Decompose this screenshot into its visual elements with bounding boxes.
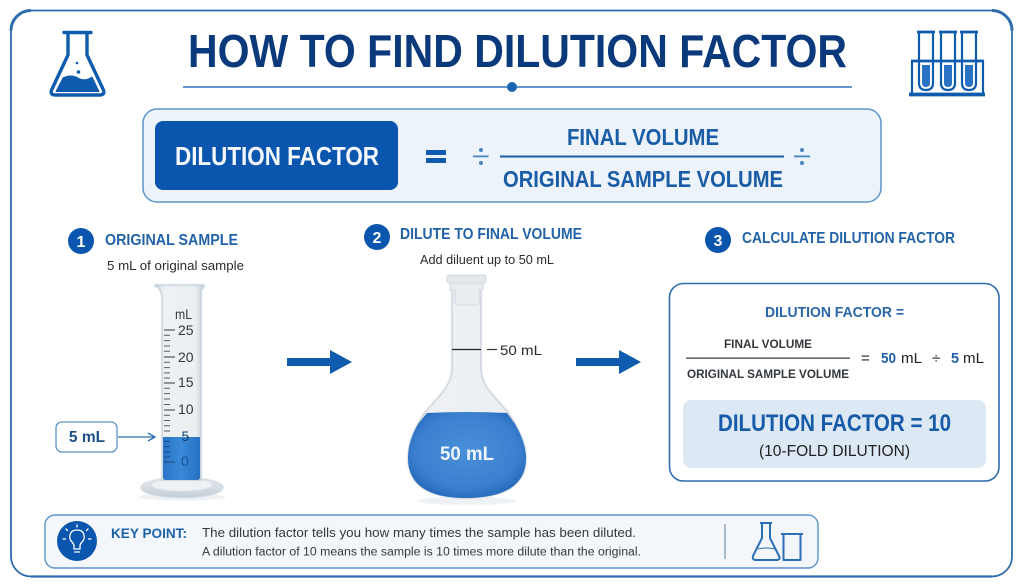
step 3 heading: 3 [714, 233, 723, 250]
worked values: 5 [951, 350, 959, 367]
volumetric flask [408, 275, 542, 505]
icon: light bulb [57, 521, 97, 561]
key point text [202, 525, 641, 558]
icon: flask and beaker [753, 523, 803, 560]
fraction: FINAL VOLUME [724, 337, 812, 351]
scale numbers: 15 [178, 374, 194, 390]
50 mL fill mark [452, 342, 542, 358]
icon: erlenmeyer flask [51, 32, 104, 95]
panel: calculation [670, 284, 999, 481]
worked values: 50 [881, 350, 896, 367]
title: HOW TO FIND DILUTION FACTOR [188, 25, 847, 77]
liquid label: 50 mL [440, 444, 494, 465]
panel: formula [143, 109, 881, 202]
scale numbers: 5 [182, 428, 190, 444]
scale numbers: 10 [178, 401, 194, 417]
key point text: A dilution factor of 10 means the sample is 10 times more dilute than the original. [202, 546, 641, 558]
key point text: The dilution factor tells you how many times the sample has been diluted. [202, 525, 636, 540]
fraction: final over original: ORIGINAL SAMPLE VOLUME [503, 166, 783, 192]
50 mL fill mark: 50 mL [500, 342, 542, 358]
result box [683, 400, 986, 468]
step 1 heading: 1 [77, 234, 86, 251]
step 2 heading: DILUTE TO FINAL VOLUME [400, 226, 582, 243]
fraction: final over original: FINAL VOLUME [567, 124, 719, 150]
fraction: final over original [500, 124, 784, 192]
worked values: = [861, 350, 870, 367]
fraction [686, 337, 850, 381]
scale numbers: mL [175, 307, 192, 322]
formula label button: DILUTION FACTOR [175, 141, 379, 171]
callout: 5 mL: 5 mL [69, 429, 105, 446]
left divide sign [473, 148, 488, 165]
step 1 heading [68, 228, 238, 254]
calculation heading: DILUTION FACTOR = [765, 305, 904, 321]
equals sign [426, 150, 446, 163]
key point label: KEY POINT: [111, 525, 187, 541]
title underline [183, 82, 852, 92]
arrow: step 2 to step 3 [576, 350, 641, 374]
stopper [447, 275, 486, 305]
scale numbers: 20 [178, 349, 194, 365]
step 2 heading: 2 [373, 230, 382, 247]
result box: (10-FOLD DILUTION) [759, 443, 910, 460]
result box: DILUTION FACTOR = 10 [718, 410, 951, 437]
step 3 heading [705, 227, 955, 253]
worked values: ÷ [932, 350, 940, 367]
worked values: mL [901, 350, 922, 367]
graduated cylinder [138, 285, 226, 500]
step 2 caption: Add diluent up to 50 mL [420, 252, 554, 267]
fraction: ORIGINAL SAMPLE VOLUME [687, 367, 849, 381]
panel: key point [45, 515, 818, 568]
right divide sign [794, 148, 810, 165]
scale numbers: 0 [181, 453, 189, 469]
step 2 heading [364, 224, 582, 250]
step 1 heading: ORIGINAL SAMPLE [105, 232, 238, 249]
scale numbers [175, 307, 194, 469]
scale ticks [164, 330, 175, 462]
icon: test tube rack [909, 32, 985, 94]
arrow: step 1 to step 2 [287, 350, 352, 374]
step 3 heading: CALCULATE DILUTION FACTOR [742, 230, 955, 247]
scale numbers: 25 [178, 322, 194, 338]
callout: 5 mL [56, 422, 155, 452]
step 1 caption: 5 mL of original sample [107, 258, 244, 273]
worked values: mL [963, 350, 984, 367]
formula label button [155, 121, 398, 190]
worked values [861, 350, 984, 367]
